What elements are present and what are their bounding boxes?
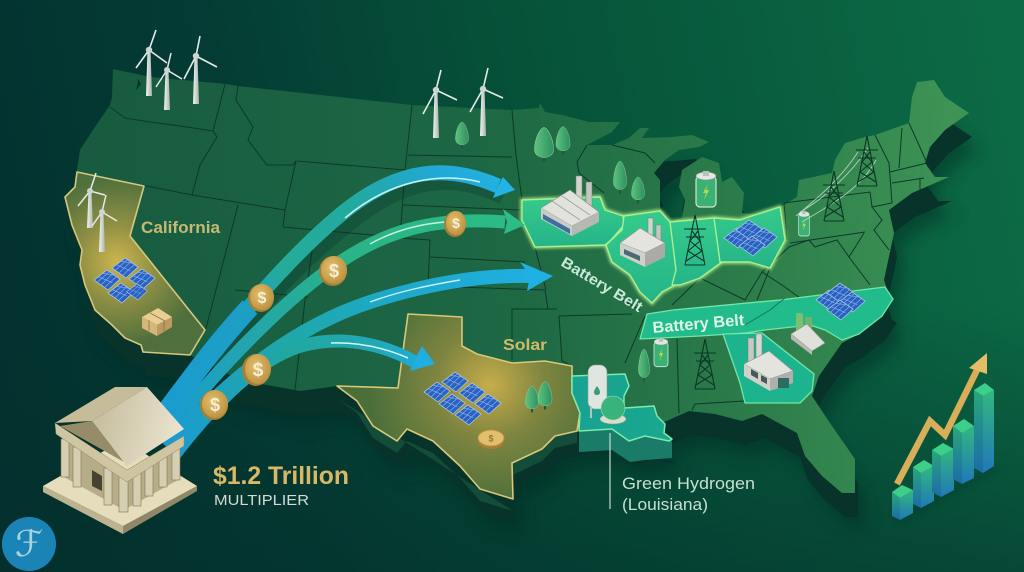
icon: hydrogen tank and sphere [588, 365, 626, 424]
icon: battery Michigan [696, 171, 716, 207]
region: Battery Belt midwest [522, 197, 785, 303]
bar 2 [913, 460, 934, 508]
icon: solar panels [94, 258, 155, 303]
coin [444, 211, 466, 237]
icon: trees [526, 382, 552, 412]
icon: wind turbine [156, 53, 182, 110]
subhead: MULTIPLIER: MULTIPLIER [214, 492, 309, 509]
icon: wind turbine [136, 30, 167, 96]
bar 5 [974, 383, 994, 473]
icon: pylon Alabama [694, 339, 716, 389]
coin: $ [210, 395, 220, 415]
callout: Green Hydrogen: (Louisiana) [622, 495, 708, 514]
coin: $ [253, 360, 264, 381]
coin: $ [452, 215, 460, 231]
icon: flat coin: $ [488, 434, 494, 444]
callout: Green Hydrogen: Green Hydrogen [622, 474, 755, 493]
coin [248, 284, 274, 312]
bar chart with rising arrow [892, 353, 1000, 525]
icon: wind turbine [423, 70, 457, 138]
icon: wind turbine [78, 173, 105, 228]
bar 3 [932, 443, 954, 497]
label: Battery Belt (midwest): Battery Belt [558, 254, 646, 316]
bank columns [61, 439, 180, 512]
icon: factory Illinois [620, 218, 665, 267]
headline: $1.2 Trillion: $1.2 Trillion [213, 462, 349, 490]
icon: battery Pennsylvania [798, 211, 810, 236]
bar 4 [953, 419, 974, 484]
coin [319, 256, 347, 286]
bank walls [62, 432, 178, 510]
label: Battery Belt (southeast): Battery Belt [652, 312, 746, 337]
icon: factory Georgia [744, 334, 793, 391]
icon: pylon Indiana [684, 215, 706, 265]
icon: wind turbine [92, 195, 117, 252]
logo badge [2, 517, 56, 571]
icon: factory South Carolina [791, 313, 825, 355]
arrow: funding flow to Ohio Valley [168, 262, 553, 448]
coin: $ [329, 261, 339, 281]
label: Solar: Solar [503, 337, 547, 354]
icon: factory Iowa [541, 176, 599, 236]
icon: trees [456, 122, 650, 382]
label: California: California [141, 218, 221, 237]
coin: $ [258, 290, 267, 307]
icon: federal bank building [43, 387, 197, 534]
coin [200, 390, 228, 420]
arrow: funding flow to Great Lakes [165, 209, 525, 435]
logo badge: ℱ [15, 524, 43, 565]
icon: flat coin [478, 430, 504, 449]
icon: transmission line [796, 136, 878, 222]
icon: wind turbine [470, 68, 503, 136]
coin [242, 354, 271, 386]
region: California [65, 172, 205, 355]
map: United States base [65, 69, 979, 535]
region: Louisiana [572, 374, 672, 462]
bank entablature and roof [55, 387, 184, 482]
icon: solar panels Ohio [724, 220, 777, 256]
state borders [77, 84, 927, 413]
bank base [43, 440, 197, 534]
region: Battery Belt southeast [640, 287, 893, 403]
icon: solar panels North Carolina [816, 283, 865, 320]
rising arrow [897, 353, 987, 484]
callout line [609, 433, 611, 509]
icon: wind turbine [184, 36, 217, 104]
bar 1 [892, 485, 913, 520]
icon: crate [142, 308, 172, 336]
icon: battery Mississippi [654, 338, 668, 367]
arrow: funding flow to Texas [172, 341, 435, 458]
arrow: funding flow to Upper Midwest [160, 173, 515, 420]
icon: solar panels [424, 372, 501, 425]
Puget Sound notch [136, 78, 141, 90]
callout: Green Hydrogen [622, 474, 755, 514]
region: Texas [337, 314, 580, 511]
